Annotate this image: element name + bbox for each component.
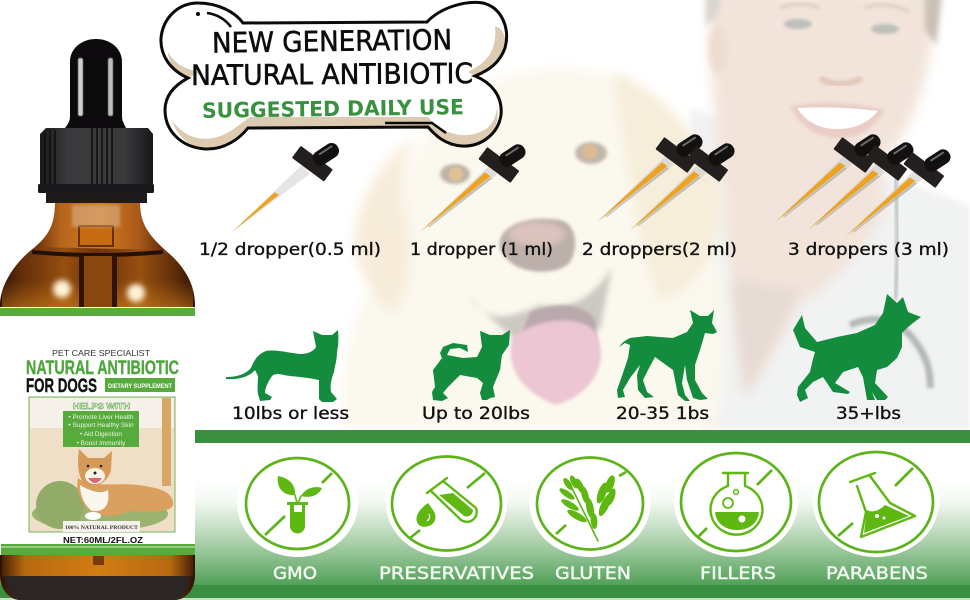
label box: benefits list: • Aid Digestion <box>80 431 122 438</box>
dropper cap <box>38 128 154 203</box>
product bottle <box>0 39 195 600</box>
icon: cat silhouette <box>226 330 338 402</box>
dosage: half dropper label: 1/2 dropper(0.5 ml) <box>199 240 381 259</box>
label: GMO: GMO <box>273 564 317 584</box>
label: parabens: PARABENS <box>826 564 928 584</box>
icon: chihuahua silhouette <box>432 330 510 401</box>
label text: for dogs: FOR DOGS <box>26 376 97 397</box>
badge: no GMO <box>237 450 358 584</box>
label box: benefits list <box>63 411 139 447</box>
label box: benefits list: • Boost Immunity <box>77 440 126 447</box>
label text: natural antibiotic: NATURAL ANTIBIOTIC <box>26 357 179 379</box>
label: up to 20lbs: Up to 20lbs <box>422 404 530 423</box>
badge: no parabens <box>813 447 939 584</box>
bottom green band <box>0 585 970 598</box>
label tag: 100% natural product <box>63 521 140 532</box>
dosage: three droppers icon <box>761 119 961 253</box>
badge: no gluten <box>530 450 650 584</box>
icon: round flask <box>710 473 762 535</box>
icon: test tube and drop <box>416 478 477 527</box>
background photo: labrador dog <box>342 68 724 430</box>
icon: sprout in test tube <box>278 476 322 534</box>
icon: wheat leaves <box>558 474 617 541</box>
label box: benefits list: • Promote Liver Health <box>68 414 134 421</box>
dosage: two droppers icon <box>583 119 745 247</box>
label: 10lbs or less: 10lbs or less <box>232 404 349 423</box>
label: 20-35 1bs: 20-35 1bs <box>616 404 709 423</box>
label text: helps with: HELPS WITH <box>73 401 130 411</box>
heading: new generation: NEW GENERATION <box>212 23 452 60</box>
label tag: 100% natural product: 100% NATURAL PRODUCT <box>65 525 138 531</box>
label box: benefits list: • Support Healthy Skin <box>68 422 134 429</box>
bottle glass body <box>0 203 195 600</box>
bone banner <box>161 2 507 149</box>
label badge: dietary supplement: DIETARY SUPPLEMENT <box>108 383 172 390</box>
label text: pet care specialist: PET CARE SPECIALIST <box>52 348 150 358</box>
label badge: dietary supplement <box>105 378 175 392</box>
label: fillers: FILLERS <box>700 564 776 584</box>
label photo: dog on cushion <box>29 397 175 532</box>
dosage: two droppers label: 2 droppers(2 ml) <box>582 240 737 259</box>
dosage: one dropper icon <box>406 129 536 248</box>
label: 35+lbs: 35+lbs <box>836 404 901 423</box>
icon: large dog silhouette <box>793 294 921 402</box>
badge: no preservatives <box>379 450 534 584</box>
label text: net volume: NET:60ML/2FL.OZ <box>63 536 143 545</box>
product label <box>0 307 195 555</box>
icon: conical flask <box>850 473 915 537</box>
label: preservatives: PRESERVATIVES <box>379 564 534 584</box>
icon: medium dog silhouette <box>617 310 717 401</box>
top green band <box>0 430 970 443</box>
dosage: half dropper icon <box>218 127 350 248</box>
heading: natural antibiotic: NATURAL ANTIBIOTIC <box>191 57 473 92</box>
badge: no fillers <box>674 447 798 584</box>
label: gluten: GLUTEN <box>555 564 631 584</box>
dropper bulb <box>65 39 126 128</box>
dosage: three droppers label: 3 droppers (3 ml) <box>788 240 949 259</box>
background photo: veterinarian <box>690 0 970 430</box>
bottom panel gradient <box>0 480 970 586</box>
heading: suggested daily use: SUGGESTED DAILY USE <box>202 95 464 123</box>
dosage: one dropper label: 1 dropper (1 ml) <box>410 240 553 259</box>
